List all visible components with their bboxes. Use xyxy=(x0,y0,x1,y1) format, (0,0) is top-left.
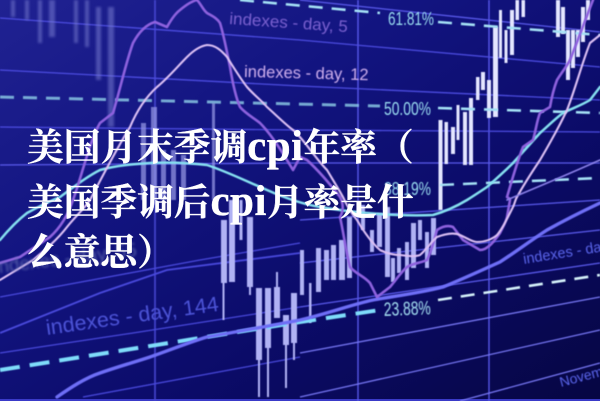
label: indexes day 5: indexes - day, 5 xyxy=(229,9,349,36)
moving average: day 200 blue curve xyxy=(57,203,600,397)
label: 61.81%: 61.81% xyxy=(388,9,434,29)
title xyxy=(27,119,414,276)
moving average: cyan curve xyxy=(0,87,600,240)
label: 38.19%: 38.19% xyxy=(384,179,431,199)
moving average: thin purple upper right xyxy=(507,160,600,200)
candlesticks: lower centre xyxy=(221,200,436,397)
label: indexes day 144: indexes - day, 144 xyxy=(44,292,220,340)
title: 美国月末季调cpi年率（ xyxy=(27,119,414,171)
label: indexes day 12: indexes - day, 12 xyxy=(244,63,369,84)
label: 23.88%: 23.88% xyxy=(383,298,431,321)
moving average: purple day 5 curve xyxy=(0,0,593,297)
moving average: pale day 12 curve xyxy=(0,35,600,280)
label: 50.00%: 50.00% xyxy=(384,99,431,119)
title: 美国季调后cpi月率是什 xyxy=(27,174,414,226)
title: 么意思） xyxy=(27,224,174,276)
candlesticks: middle xyxy=(141,103,215,200)
candlesticks: upper right xyxy=(438,0,590,210)
candlesticks: faded upper left xyxy=(11,0,114,127)
